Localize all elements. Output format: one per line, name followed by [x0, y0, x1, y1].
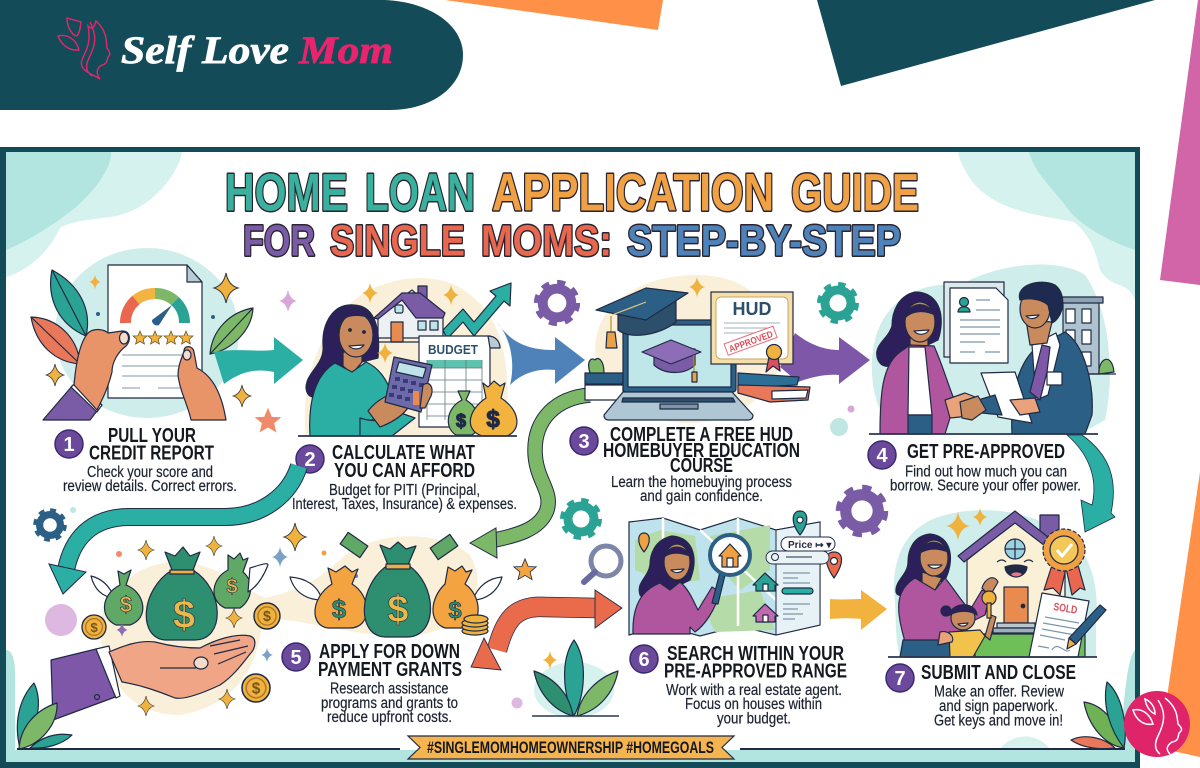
step 4 text: GET PRE-APPROVED [907, 441, 1065, 463]
step 7 text: and sign paperwork. [939, 698, 1058, 715]
icon: gear blue [35, 510, 65, 540]
stars [133, 331, 193, 344]
icon: badge with ribbon [1043, 529, 1085, 595]
step 4 text [868, 441, 1081, 494]
icon: documents [944, 282, 1008, 363]
icon: books right [738, 373, 810, 402]
step 2 text: Budget for PITI (Principal, [329, 482, 480, 499]
arrow: step 2 to 5 (teal) [49, 466, 299, 594]
number badge 1: 1 [63, 434, 75, 456]
map pins [639, 511, 842, 578]
step 5 text: Research assistance [330, 680, 448, 698]
number badge 5 [282, 643, 310, 671]
icon: growth arrow [443, 283, 511, 339]
woman with magnifier [633, 535, 750, 634]
step 7 text [886, 662, 1076, 730]
step 4 text: Find out how much you can [905, 464, 1067, 480]
icon: gear purple large [839, 488, 885, 534]
step 5 text [282, 641, 462, 726]
icon: money bags: $ [456, 411, 466, 431]
title: LOAN [365, 164, 475, 222]
arrow: step 6 to 7 [830, 590, 887, 630]
icon: daughter [938, 605, 996, 657]
step 4 text: borrow. Secure your offer power. [890, 478, 1081, 494]
step 7 text: SUBMIT AND CLOSE [921, 662, 1076, 684]
number badge 7: 7 [894, 668, 906, 690]
arrow: step 1 to 2 [214, 337, 303, 384]
step 3 text [570, 424, 800, 505]
step 6 text [630, 643, 847, 728]
panel: step 4 pre-approved illustration [869, 265, 1116, 434]
sparkles [46, 273, 251, 407]
icon: house [374, 286, 445, 342]
step 3 text: COMPLETE A FREE HUD [610, 424, 793, 446]
icon: woman in magenta [877, 292, 978, 434]
logo text: Mom [298, 29, 393, 72]
step 3 text: HOMEBUYER EDUCATION [603, 440, 800, 462]
icon: bags left group: $ [226, 576, 238, 598]
number badge 3: 3 [578, 431, 590, 453]
logo text: Self Love [121, 29, 289, 72]
number badge 2 [296, 445, 324, 473]
panel: step 3 education illustration [585, 275, 810, 423]
baseline [869, 433, 1098, 435]
icon: budget sheet: BUDGET [428, 343, 478, 357]
hashtag ribbon: #SINGLEMOMHOMEOWNERSHIP #HOMEGOALS [427, 738, 714, 757]
icon: open hand [51, 635, 255, 720]
logo icon: woman and leaf [58, 18, 110, 79]
icon: gear teal [562, 500, 600, 538]
price pill: Price ↦ ▾ [788, 540, 832, 551]
step 6 text: SEARCH WITHIN YOUR [667, 643, 844, 665]
icon: bags left group [91, 547, 268, 640]
arrow: step 3 to 5 (green) [470, 395, 590, 558]
step 2 text [292, 442, 517, 513]
number badge 4: 4 [876, 445, 888, 467]
icon: house with smile [958, 511, 1085, 657]
title: GUIDE [791, 164, 919, 222]
step 2 text: YOU CAN AFFORD [334, 460, 475, 482]
star: coral [255, 408, 281, 432]
step 5 text: PAYMENT GRANTS [318, 659, 462, 681]
icon: coins [82, 603, 280, 702]
infographic frame [0, 147, 1140, 768]
icon: credit report document [108, 265, 202, 398]
number badge 1 [55, 430, 83, 458]
gauge [125, 293, 185, 323]
icon: budget sheet [419, 336, 500, 427]
icon: money bags [448, 381, 517, 436]
title: STEP-BY-STEP [627, 216, 901, 266]
icon: graduation cap on screen [642, 340, 701, 382]
arrow: double headed orange [471, 590, 622, 670]
icon: pen [1067, 605, 1106, 649]
icon: plant [512, 640, 619, 718]
panel: step 6 map illustration [629, 511, 842, 636]
icon: bags left group: $ [120, 592, 132, 617]
icon: magnifier [584, 546, 621, 582]
sparkles [138, 523, 306, 716]
title: MOMS: [481, 216, 612, 266]
icon: gear purple [537, 283, 577, 323]
icon: mother [896, 534, 998, 657]
step 6 text: PRE-APPROVED RANGE [664, 660, 847, 682]
sparkles [947, 508, 987, 540]
header banner with logo [0, 0, 463, 110]
icon: money bags: $ [486, 406, 500, 433]
title: APPLICATION [492, 164, 774, 222]
icon: bags right group: $ [387, 589, 409, 631]
icon: laptop [604, 320, 753, 420]
number badge 7 [886, 664, 914, 692]
icon: round pink logo badge [1124, 691, 1190, 757]
number badge 6 [630, 645, 658, 673]
decorative shape: magenta right [1160, 0, 1200, 285]
icon: sold document [1029, 593, 1089, 657]
number badge 3 [570, 427, 598, 455]
title [225, 164, 919, 266]
icon: bags right group: $ [448, 597, 462, 624]
step 1 text: review details. Correct errors. [63, 478, 237, 495]
step 1 text: Check your score and [87, 464, 213, 481]
step 3 text: and gain confidence. [640, 488, 763, 505]
icon: flying bills [340, 532, 458, 560]
arrow: step 3 to 4 [780, 333, 870, 384]
step 2 text: CALCULATE WHAT [332, 442, 475, 464]
icon: gear teal [820, 284, 856, 322]
step 3 text: Learn the homebuying process [611, 474, 792, 491]
icon: leaves [31, 270, 253, 364]
icon: HUD certificate [711, 292, 793, 372]
icon: bags right group [290, 542, 502, 637]
baseline [298, 435, 517, 437]
decorative shape: orange right [1168, 472, 1200, 757]
number badge 6: 6 [638, 649, 650, 671]
step 1 text: CREDIT REPORT [89, 442, 214, 464]
icon: coin stack [462, 615, 488, 635]
logo text [121, 29, 393, 72]
corner blobs [6, 152, 1135, 300]
sparkles [362, 283, 459, 363]
icon: bottom-left leaves [17, 683, 72, 749]
bottom rule lines [17, 748, 1125, 750]
baseline [888, 656, 1097, 658]
step 5 text: APPLY FOR DOWN [319, 641, 460, 663]
number badge 5: 5 [290, 647, 302, 669]
panel: step 5 grants illustration [45, 523, 502, 720]
price pill [781, 537, 835, 551]
icon: bags left group: $ [173, 593, 195, 637]
icon: hands holding report [43, 330, 226, 420]
decorative shape: teal top [817, 0, 1155, 86]
map sheet [629, 518, 820, 636]
step 2 text: Interest, Taxes, Insurance) & expenses. [292, 496, 517, 513]
step 7 text: Get keys and move in! [934, 712, 1063, 730]
icon: key [982, 591, 996, 618]
number badge 2: 2 [304, 449, 316, 471]
icon: HUD certificate: APPROVED [728, 329, 775, 355]
step 5 text: programs and grants to [321, 695, 458, 712]
panel: step 7 closing illustration [888, 508, 1106, 657]
search bar [766, 551, 829, 564]
sparkle orange [514, 559, 536, 580]
number badge 4 [868, 441, 896, 469]
icon: sold document: SOLD [1053, 601, 1078, 617]
icon: bags right group: $ [332, 594, 347, 624]
step 5 text: reduce upfront costs. [327, 709, 452, 726]
icon: woman with calculator [306, 305, 432, 436]
dots decorative [848, 406, 854, 412]
icon: building [1060, 297, 1116, 374]
panel: step 2 budget illustration [298, 278, 517, 436]
step 7 text: Make an offer. Review [934, 684, 1065, 700]
icon: HUD certificate: HUD [732, 299, 772, 319]
hashtag ribbon [408, 736, 734, 759]
arrow: step 4 to 7 [1067, 435, 1115, 532]
sparkle: lilac [279, 290, 297, 312]
step 6 text: your budget. [717, 710, 791, 728]
icon: man in suit [960, 282, 1092, 434]
step 3 text: COURSE [670, 455, 733, 477]
icon: books left [585, 359, 623, 400]
arrow: step 2 to 3 [497, 322, 585, 385]
title: FOR [243, 216, 315, 266]
title: SINGLE [330, 216, 465, 266]
step 1 text [55, 425, 237, 495]
icon: bottom-right leaves [1071, 682, 1125, 749]
step 1 text: PULL YOUR [108, 425, 196, 447]
panel: step 1 credit report illustration [31, 248, 253, 420]
bottom band [6, 650, 1135, 762]
icons: listing houses [753, 573, 813, 622]
step 6 text: Work with a real estate agent. [666, 682, 842, 699]
step 6 text: Focus on houses within [685, 696, 822, 713]
decorative shape: orange top [445, 0, 663, 30]
icon: navy graduation cap [596, 288, 688, 348]
title: HOME [225, 164, 348, 222]
